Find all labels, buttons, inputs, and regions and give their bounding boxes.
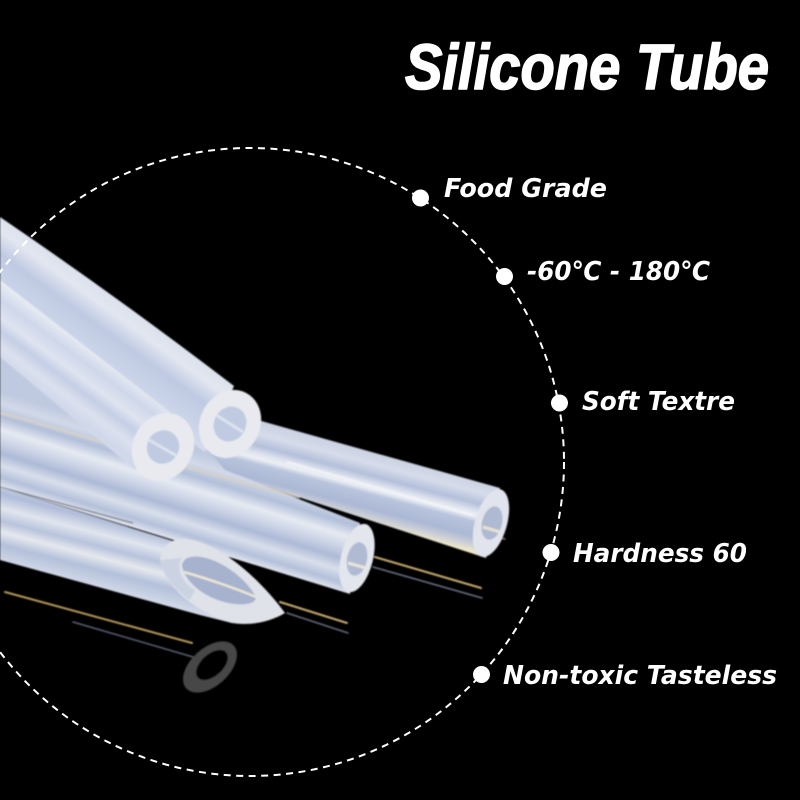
dashed circle <box>0 148 564 776</box>
tube E: angled cut tube <box>0 487 285 624</box>
feature: soft texture: Soft Textre <box>582 387 735 417</box>
tube B: upper front tube <box>0 280 206 492</box>
tube D: middle tube <box>0 340 381 596</box>
reflection ring <box>174 631 246 703</box>
feature: temperature range: -60℃ - 180℃ <box>527 257 710 287</box>
feature: food grade: Food Grade <box>444 174 607 204</box>
wires and reflections <box>5 537 505 657</box>
feature: hardness: Hardness 60 <box>573 539 747 569</box>
feature: non-toxic: Non-toxic Tasteless <box>503 661 777 691</box>
tube A: upper back tube <box>0 217 273 469</box>
photo: silicone tubes <box>0 217 516 703</box>
tube C: long right tube <box>200 415 516 561</box>
